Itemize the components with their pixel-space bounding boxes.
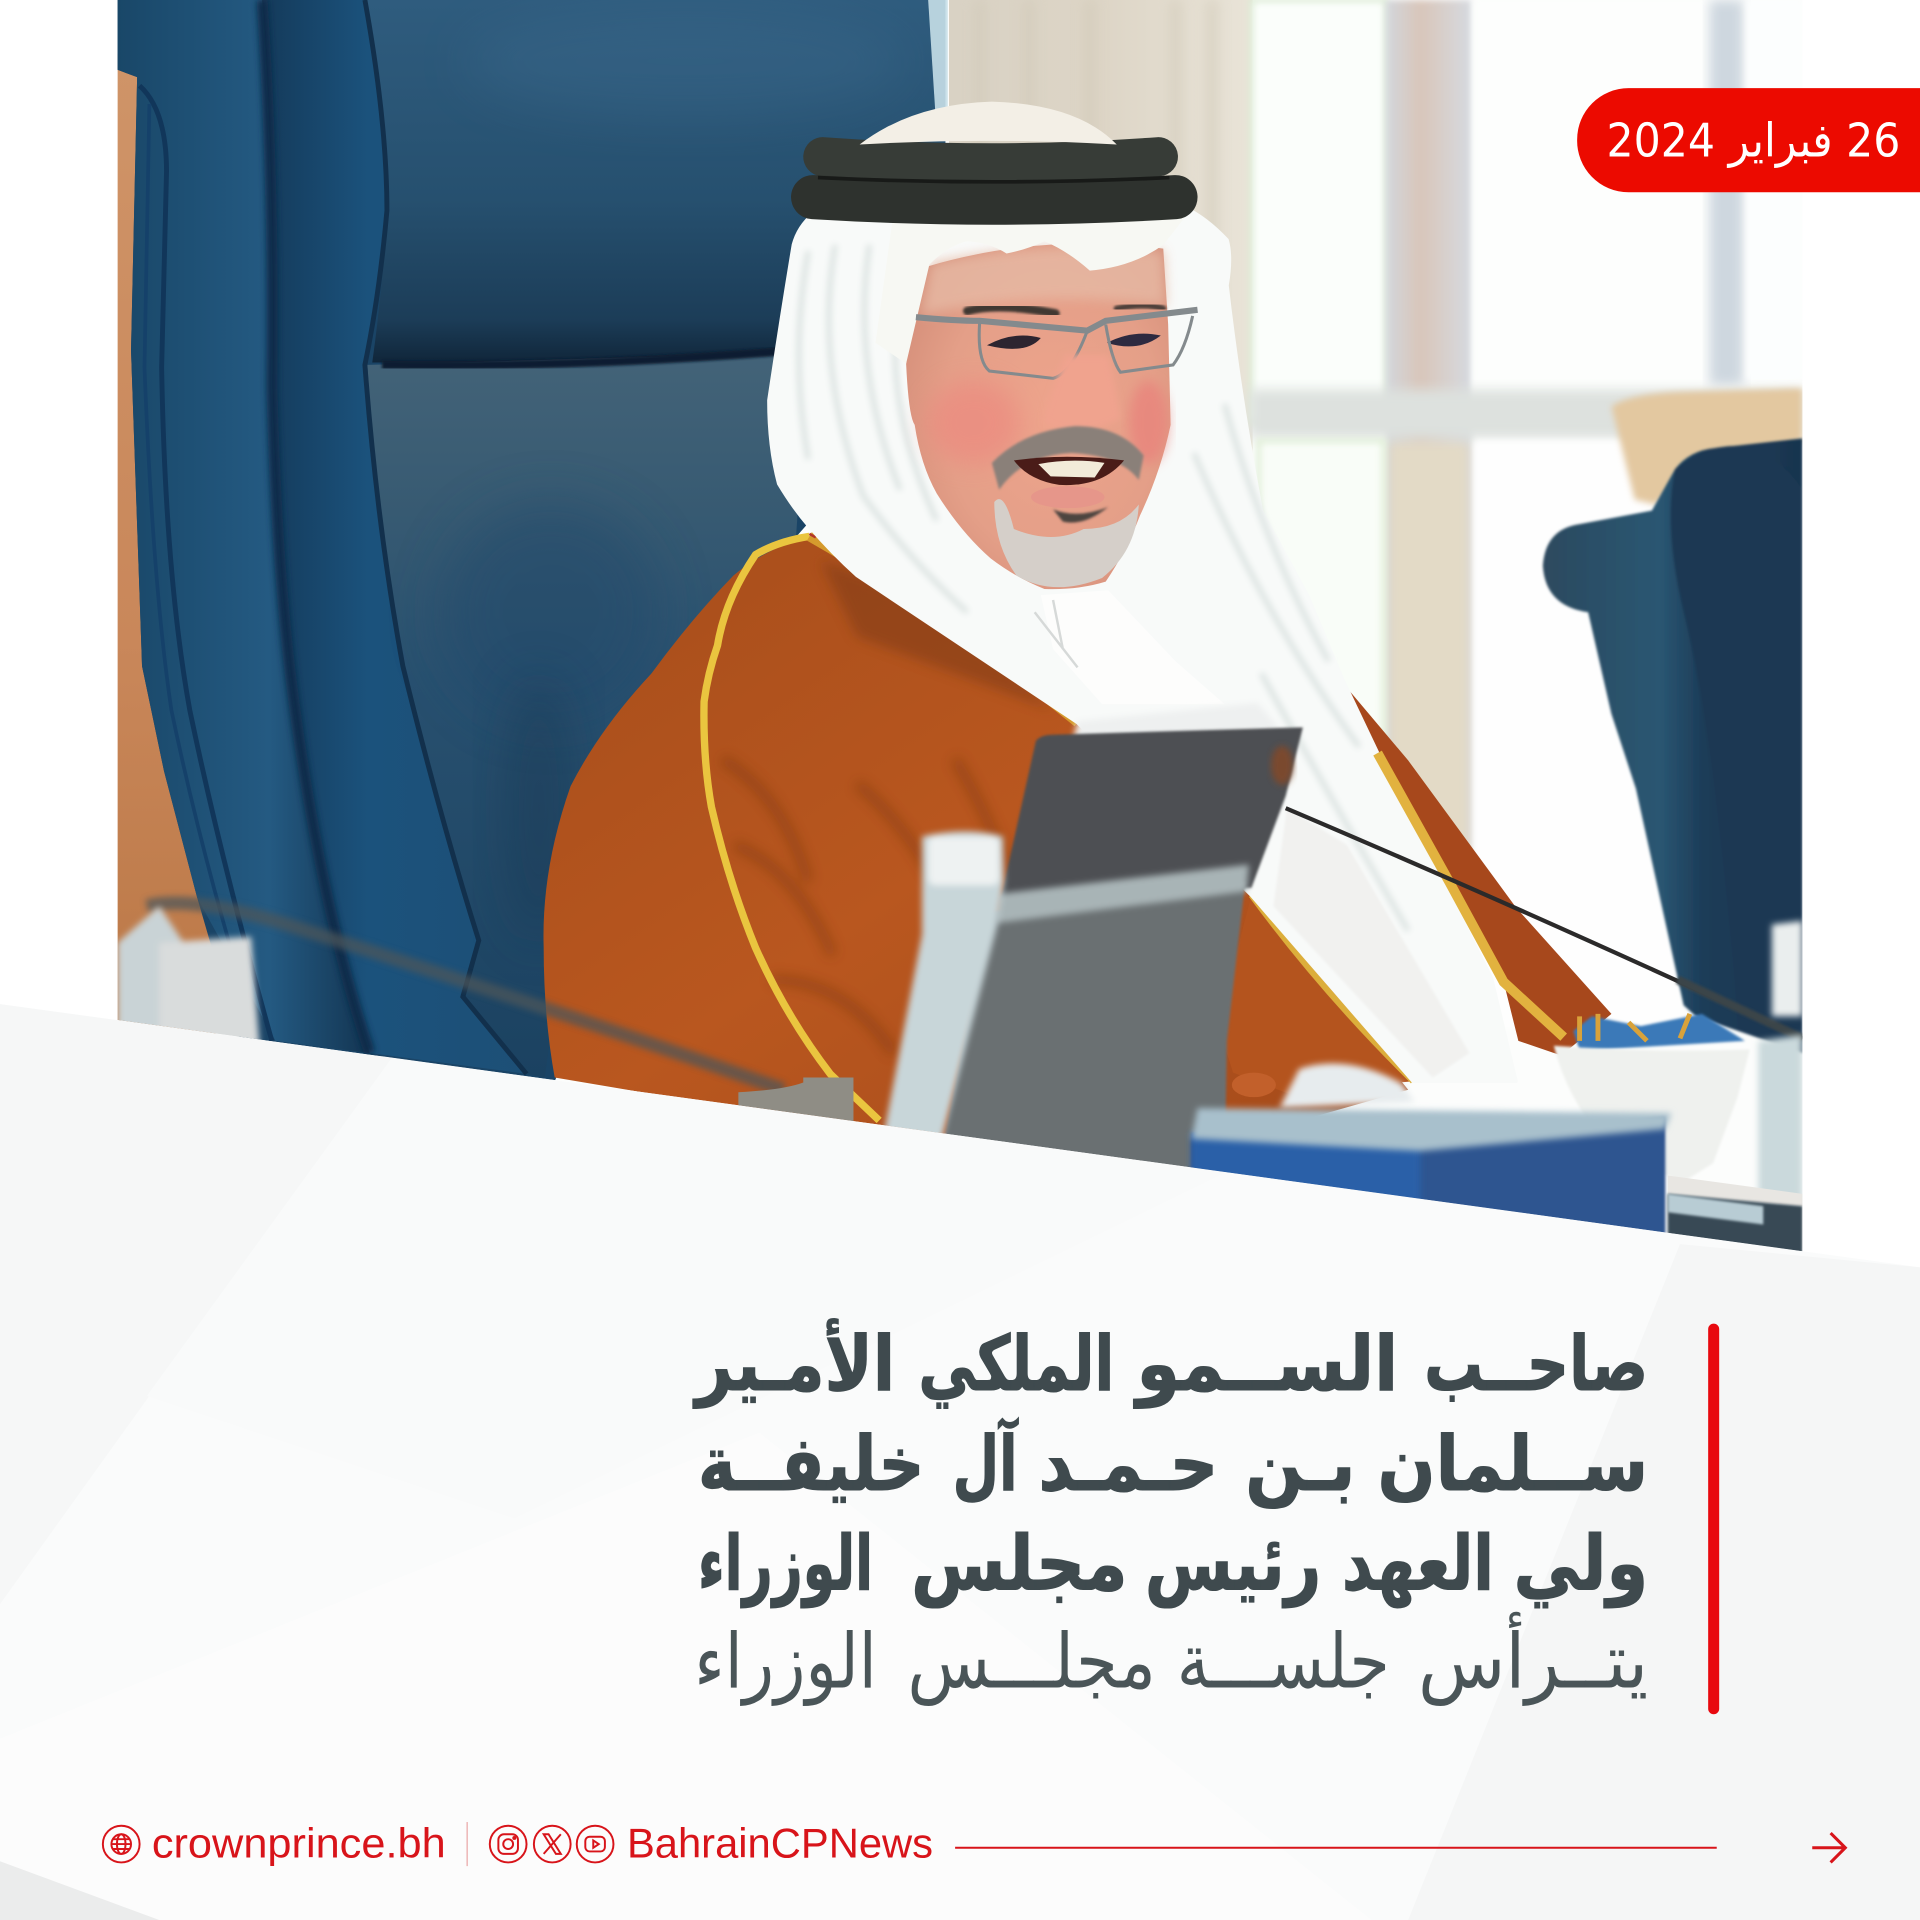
glass bottle bbox=[884, 831, 1004, 1145]
robe body bbox=[543, 534, 1413, 1139]
title line 2 bbox=[698, 1417, 1648, 1509]
icon: youtube bbox=[577, 1826, 613, 1862]
cup with candy bbox=[1554, 1014, 1750, 1182]
outer wing of chair bbox=[118, 0, 370, 1053]
nose bbox=[1052, 350, 1115, 380]
subtitle line: الوزراء bbox=[694, 1617, 877, 1706]
subtitle line: مجلـــس bbox=[907, 1617, 1156, 1705]
title line 2: حـمـد bbox=[1038, 1420, 1218, 1508]
chair: right background bbox=[1543, 438, 1802, 1053]
icon: X bbox=[534, 1826, 571, 1862]
photo: crown prince at cabinet session bbox=[118, 0, 1802, 1261]
head crown and igal bbox=[813, 102, 1176, 203]
water glass right bbox=[1758, 921, 1802, 1206]
chair: main back bbox=[118, 0, 948, 1090]
arrow bbox=[1812, 1833, 1845, 1862]
title line 3 bbox=[698, 1519, 1648, 1608]
title line 1: الملكي bbox=[918, 1320, 1114, 1409]
lower lip bbox=[1031, 486, 1104, 508]
microphone cable right bbox=[1286, 808, 1802, 1038]
eyes bbox=[987, 334, 1161, 349]
title line 3: مجلس bbox=[911, 1519, 1128, 1607]
title line 2: ســلمان bbox=[1378, 1420, 1648, 1508]
subtitle line bbox=[694, 1611, 1648, 1706]
gold trim lower right bbox=[1251, 895, 1413, 1081]
subtitle line: يتــرأس bbox=[1418, 1611, 1648, 1706]
mouth and teeth bbox=[1014, 457, 1124, 485]
headscarf fringe bbox=[891, 242, 1160, 364]
social handle text: BahrainCPNews bbox=[627, 1820, 933, 1867]
title line 1: الســمو bbox=[1133, 1320, 1398, 1409]
lower cushion bbox=[368, 355, 798, 862]
icon: instagram bbox=[490, 1826, 527, 1862]
date text: 26 فبراير 2024 bbox=[1607, 114, 1900, 169]
icon: globe bbox=[103, 1826, 140, 1862]
date badge bbox=[1577, 88, 1920, 192]
title line 1: الأمـير bbox=[692, 1318, 895, 1409]
gold trim left bbox=[704, 536, 879, 1120]
title line 1: صاحــب bbox=[1424, 1320, 1648, 1408]
goatee bbox=[994, 499, 1139, 587]
gold trim right bbox=[1378, 753, 1564, 1037]
upper cushion bbox=[365, 0, 945, 362]
title line 3: العهد bbox=[1342, 1519, 1494, 1608]
right sleeve of robe bbox=[1342, 682, 1611, 1056]
microphone cable left blurred bbox=[147, 903, 784, 1090]
title line 2: آل bbox=[953, 1417, 1019, 1508]
tablet bbox=[943, 703, 1303, 1188]
title line 3: رئيس bbox=[1145, 1519, 1321, 1608]
glasses bbox=[916, 310, 1198, 378]
title line 2: خليفــة bbox=[698, 1420, 924, 1508]
footer line bbox=[955, 1847, 1717, 1849]
divider bbox=[466, 1822, 468, 1866]
website text: crownprince.bh bbox=[152, 1820, 446, 1867]
title line 1 bbox=[692, 1318, 1648, 1409]
footer bbox=[103, 1820, 1845, 1867]
face bbox=[891, 242, 1198, 590]
red accent bar bbox=[1708, 1324, 1719, 1714]
microphone base bbox=[738, 1078, 853, 1127]
gold trim neck bbox=[809, 536, 1078, 722]
eyebrows bbox=[967, 307, 1056, 313]
lower panel with subtle geometric background bbox=[0, 1004, 1920, 1920]
subtitle line: جلســـة bbox=[1177, 1617, 1390, 1705]
room background with windows bbox=[949, 0, 1802, 850]
tissue box bbox=[1191, 1064, 1802, 1255]
title line 2: بـن bbox=[1245, 1420, 1356, 1509]
title line 3: ولي bbox=[1513, 1519, 1648, 1608]
center strip of chair bbox=[262, 0, 527, 1074]
blurred glasses left bbox=[118, 906, 260, 1047]
white headscarf (ghutra) bbox=[769, 208, 1564, 1081]
title line 3: الوزراء bbox=[698, 1519, 873, 1608]
wooden wall strip bbox=[118, 54, 216, 1034]
title text block bbox=[692, 1318, 1648, 1706]
moustache bbox=[992, 426, 1144, 490]
